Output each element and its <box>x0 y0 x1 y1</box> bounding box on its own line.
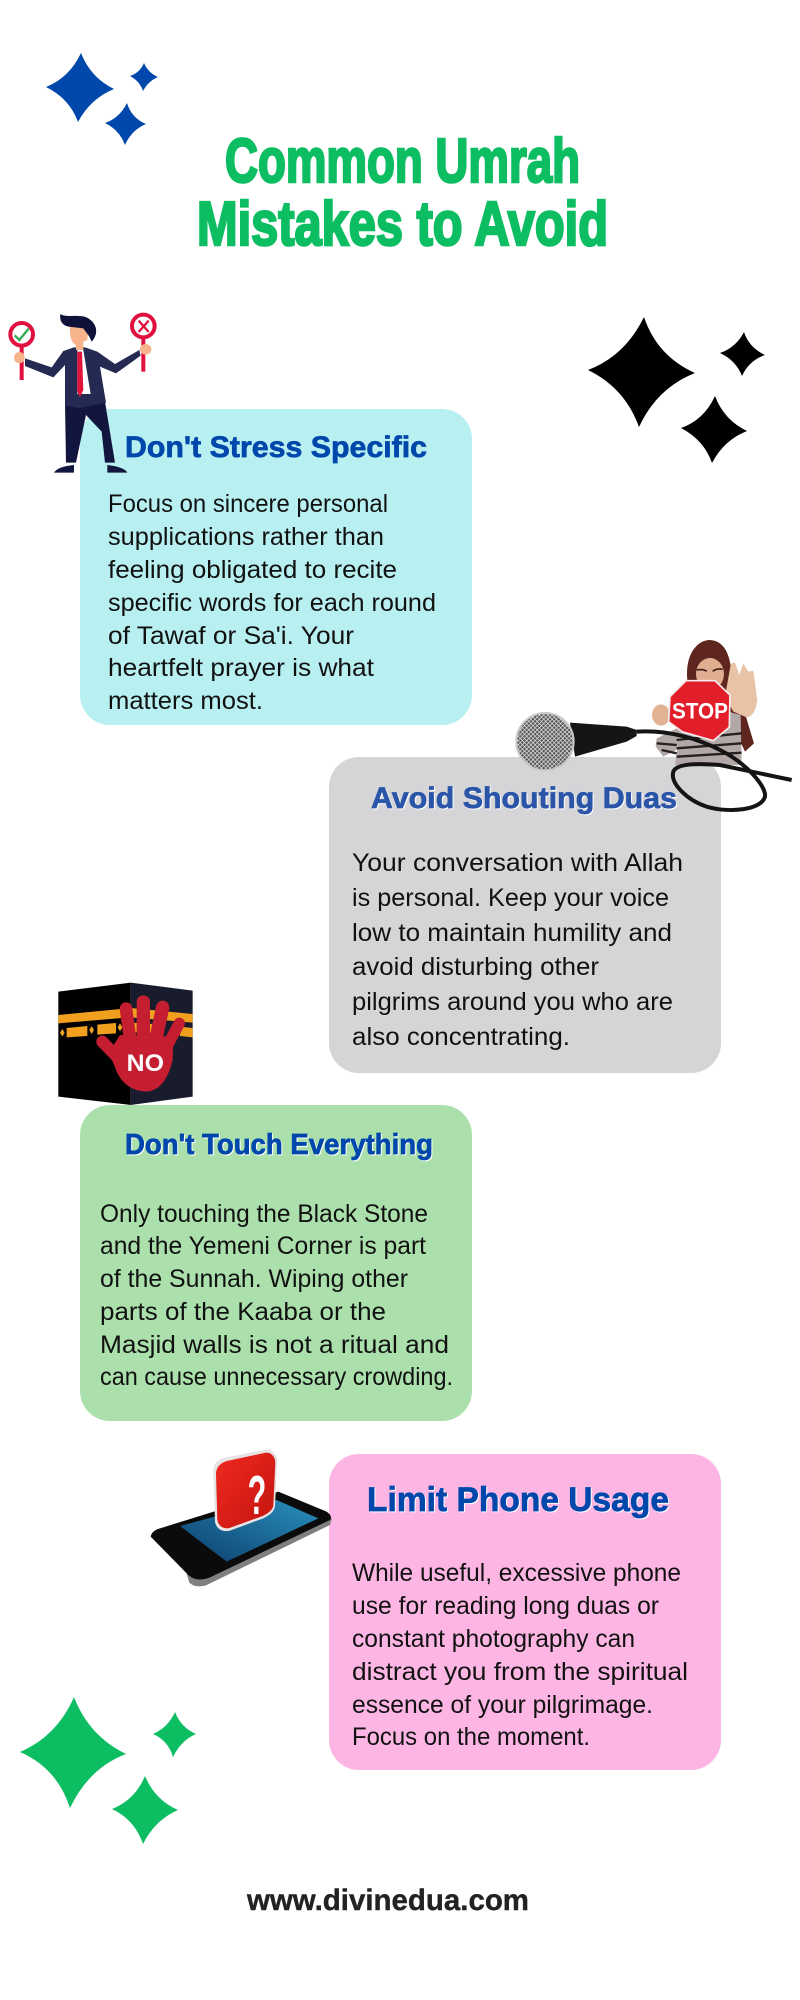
body text: feeling obligated to recite <box>108 556 397 584</box>
body text: Focus on the moment. <box>352 1723 590 1751</box>
body text: Focus on sincere personal <box>108 490 388 518</box>
footer url: www.divinedua.com <box>246 1884 529 1917</box>
body text: and the Yemeni Corner is part <box>100 1232 426 1260</box>
heading: Don't Stress Specific <box>125 431 427 464</box>
decorative stars: green <box>20 1697 196 1844</box>
body text <box>352 1559 688 1751</box>
panel: don't touch everything <box>80 1105 472 1421</box>
title <box>197 127 608 259</box>
body text: distract you from the spiritual <box>352 1658 688 1686</box>
body text <box>108 490 436 715</box>
body text: use for reading long duas or <box>352 1592 659 1620</box>
body text: While useful, excessive phone <box>352 1559 681 1587</box>
body text <box>352 849 683 1051</box>
body text: of the Sunnah. Wiping other <box>100 1265 408 1293</box>
body text: of Tawaf or Sa'i. Your <box>108 622 354 650</box>
title: Common Umrah <box>225 127 580 196</box>
panel background <box>329 1454 721 1770</box>
body text: parts of the Kaaba or the <box>100 1298 386 1326</box>
body text: Your conversation with Allah <box>352 849 683 877</box>
icon: smartphone with question mark tile <box>151 1449 332 1586</box>
heading: Limit Phone Usage <box>367 1481 669 1519</box>
body text: Masjid walls is not a ritual and <box>100 1331 449 1359</box>
body text: avoid disturbing other <box>352 953 599 981</box>
title: Mistakes to Avoid <box>197 190 608 259</box>
icon: kaaba with red stop hand <box>58 983 193 1105</box>
body text: can cause unnecessary crowding. <box>100 1363 453 1391</box>
woman <box>652 640 757 765</box>
question mark: ? <box>248 1464 266 1526</box>
body text: is personal. Keep your voice <box>352 884 669 912</box>
stop sign <box>669 681 730 741</box>
body text <box>100 1200 453 1391</box>
panel: avoid shouting duas <box>329 757 721 1073</box>
body text: matters most. <box>108 687 263 715</box>
body text: specific words for each round <box>108 589 436 617</box>
body text: supplications rather than <box>108 523 384 551</box>
panel background <box>329 757 721 1073</box>
icon: microphone and woman with stop sign <box>516 640 792 810</box>
body text: essence of your pilgrimage. <box>352 1691 653 1719</box>
decorative stars: blue <box>46 53 158 145</box>
icon: businessman holding check and cross signs <box>10 314 155 473</box>
hand <box>102 1002 179 1092</box>
panel background <box>80 409 472 725</box>
decorative stars: black <box>588 317 765 463</box>
body text: also concentrating. <box>352 1023 570 1051</box>
panel: don't stress specific <box>80 409 472 725</box>
body text: constant photography can <box>352 1625 635 1653</box>
heading: Don't Touch Everything <box>125 1129 433 1161</box>
body text: Only touching the Black Stone <box>100 1200 428 1228</box>
panel: limit phone usage <box>329 1454 721 1770</box>
body text: heartfelt prayer is what <box>108 654 374 682</box>
no label: NO <box>127 1050 164 1077</box>
body text: low to maintain humility and <box>352 919 672 947</box>
body text: pilgrims around you who are <box>352 988 673 1016</box>
microphone <box>516 712 792 810</box>
stop sign: STOP <box>672 699 728 724</box>
heading: Avoid Shouting Duas <box>371 782 677 815</box>
panel background <box>80 1105 472 1421</box>
